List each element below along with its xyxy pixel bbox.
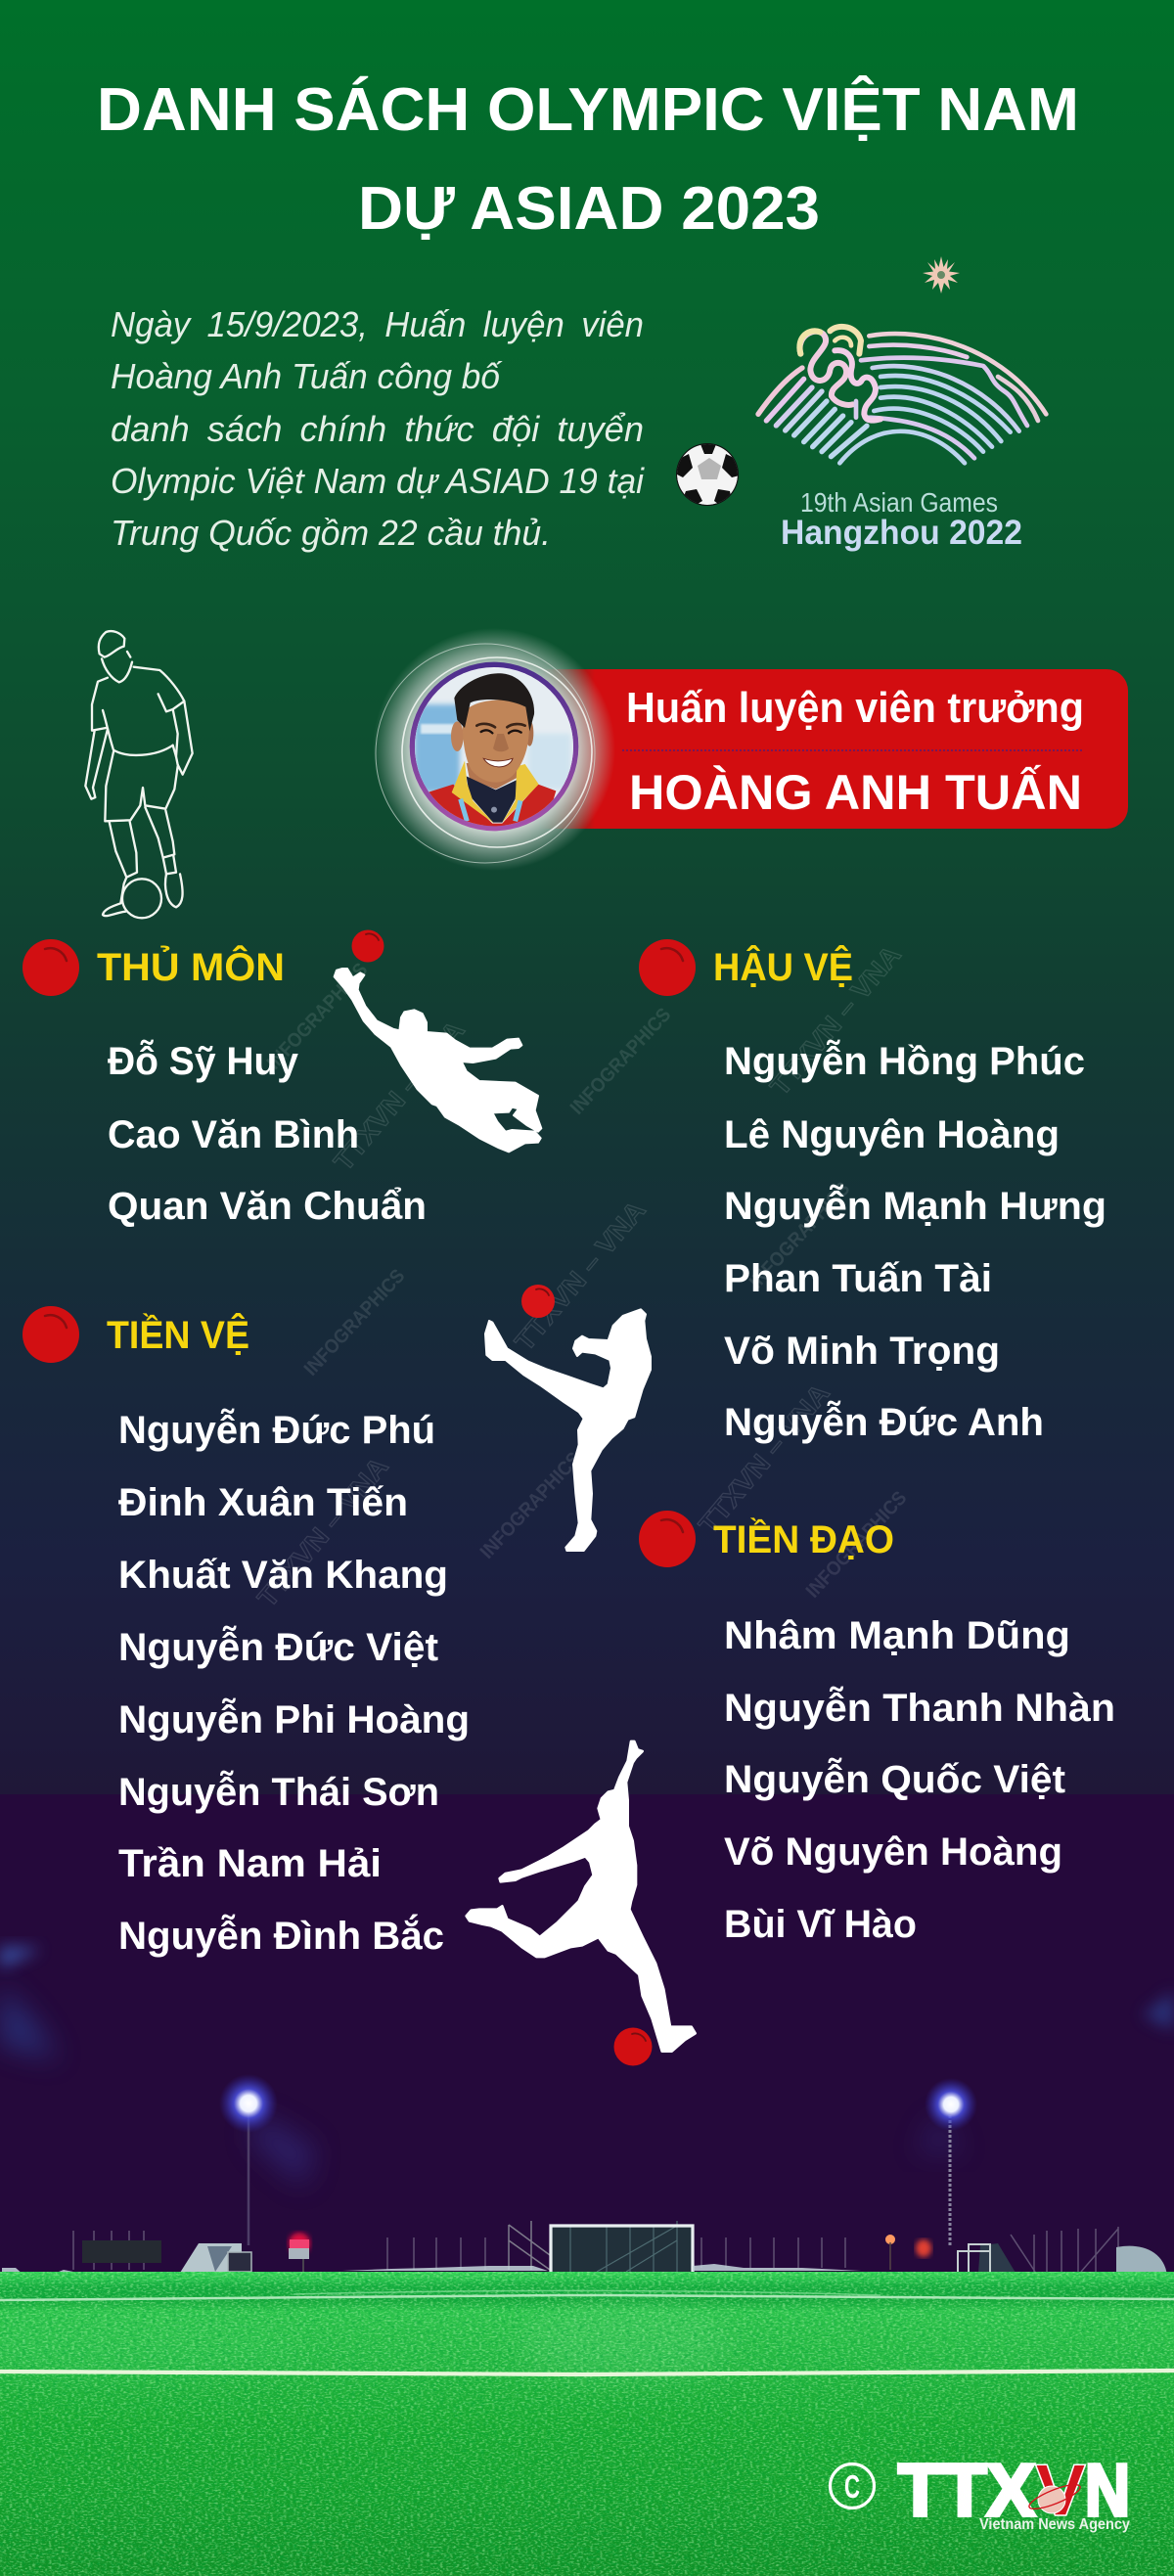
player list: Phan Tuấn Tài	[724, 1257, 992, 1300]
section: midfielders (Tiền vệ)	[23, 1306, 470, 1958]
logo sun	[923, 256, 960, 294]
dugout	[1116, 2246, 1167, 2276]
stadium background	[0, 1947, 1174, 2576]
watermarks: TTXVN – VNA	[765, 940, 907, 1102]
wordmark: N	[1085, 2449, 1130, 2531]
player list: Nhâm Mạnh Dũng	[724, 1614, 1070, 1657]
portrait halo	[373, 628, 615, 871]
red sign	[289, 2233, 310, 2272]
coach name: HOÀNG ANH TUẤN	[629, 765, 1082, 820]
icon: goalkeeper silhouette with ball	[335, 929, 541, 1152]
player list: Khuất Văn Khang	[118, 1554, 448, 1597]
Asian Games logo	[758, 256, 1046, 552]
title: DỰ ASIAD 2023	[358, 175, 820, 243]
wordmark: TTX	[898, 2449, 1035, 2531]
main goal	[509, 2221, 693, 2273]
red name plate	[540, 669, 1128, 829]
right small goal	[958, 2243, 1016, 2273]
watermarks: TTXVN – VNA	[252, 1452, 394, 1613]
title	[97, 76, 1079, 243]
player list: Nguyễn Quốc Việt	[724, 1756, 1065, 1801]
heading: THỦ MÔN	[97, 944, 285, 989]
player list: Nguyễn Thái Sơn	[118, 1769, 439, 1814]
player list	[108, 1038, 427, 1228]
icon: red ball bullet	[23, 1306, 79, 1363]
left small goal	[180, 2243, 251, 2273]
dotted divider	[622, 749, 1084, 751]
TTXVN logo	[830, 2449, 1130, 2533]
intro text block	[111, 304, 645, 553]
player list: Võ Nguyên Hoàng	[724, 1830, 1062, 1874]
heading: HẬU VỆ	[713, 944, 853, 989]
red lamps	[885, 2235, 931, 2270]
panel: head coach	[373, 628, 1128, 871]
player list: Trần Nam Hải	[118, 1842, 382, 1885]
globe mark	[1026, 2480, 1083, 2513]
watermarks: INFOGRAPHICS	[263, 959, 372, 1074]
player list: Lê Nguyên Hoàng	[724, 1113, 1060, 1156]
watermarks: TTXVN – VNA	[694, 1378, 835, 1540]
watermarks: INFOGRAPHICS	[745, 1178, 854, 1293]
player list: Nguyễn Đức Phú	[118, 1407, 435, 1452]
icon: outline player with ball	[85, 631, 193, 918]
section: forwards (Tiền đạo)	[639, 1511, 1115, 1946]
icon: kicking player silhouette with ball	[485, 1285, 651, 1551]
player list	[724, 1038, 1106, 1444]
player list: Võ Minh Trọng	[724, 1330, 1000, 1373]
copyright mark	[830, 2463, 875, 2508]
player list: Nguyễn Hồng Phúc	[724, 1038, 1085, 1083]
section: goalkeepers (Thủ môn)	[23, 939, 427, 1228]
icon: striker silhouette with ball	[467, 1741, 696, 2066]
wordmark: V	[1035, 2449, 1086, 2531]
heading: TIỀN VỆ	[107, 1312, 249, 1357]
title: DANH SÁCH OLYMPIC VIỆT NAM	[97, 76, 1079, 144]
logo text: 19th Asian Games	[800, 487, 998, 518]
watermarks: INFOGRAPHICS	[476, 1448, 585, 1563]
watermarks: TTXVN – VNA	[329, 1016, 471, 1177]
agency name: Vietnam News Agency	[979, 2516, 1130, 2533]
player list	[118, 1407, 470, 1958]
watermarks: INFOGRAPHICS	[566, 1004, 675, 1119]
player list: Nguyễn Đức Anh	[724, 1399, 1044, 1444]
scoreboard	[82, 2240, 161, 2263]
icon: red ball bullet	[23, 939, 79, 996]
player list: Nguyễn Phi Hoàng	[118, 1696, 470, 1741]
intro text block: Trung Quốc gồm 22 cầu thủ.	[111, 513, 551, 553]
light poles	[219, 2074, 977, 2245]
intro text block: Ngày 15/9/2023, Huấn luyện viên	[111, 304, 644, 344]
player list: Nguyễn Mạnh Hưng	[724, 1183, 1106, 1228]
logo emblem	[758, 327, 1046, 463]
watermarks: INFOGRAPHICS	[802, 1487, 911, 1603]
player list	[724, 1614, 1115, 1946]
wordmark	[898, 2449, 1130, 2531]
player list: Nguyễn Đình Bắc	[118, 1913, 444, 1958]
section: defenders (Hậu vệ)	[639, 939, 1106, 1444]
heading: TIỀN ĐẠO	[713, 1516, 894, 1561]
coach portrait	[410, 662, 578, 832]
fence posts	[73, 2227, 1118, 2272]
player list: Nguyễn Đức Việt	[118, 1624, 438, 1669]
grass field	[0, 2272, 1174, 2576]
player list: Nguyễn Thanh Nhàn	[724, 1685, 1115, 1730]
player list: Bùi Vĩ Hào	[724, 1903, 917, 1946]
watermarks: INFOGRAPHICS	[300, 1265, 409, 1380]
icon: red ball bullet	[639, 939, 696, 996]
snow mounds	[2, 2264, 861, 2277]
icon: red ball bullet	[639, 1511, 696, 1567]
watermarks	[252, 940, 911, 1613]
player list: Đinh Xuân Tiến	[118, 1481, 408, 1524]
player list: Cao Văn Bình	[108, 1113, 359, 1156]
player list: Đỗ Sỹ Huy	[108, 1038, 299, 1083]
icon: soccer ball	[675, 443, 740, 507]
decorative rings	[376, 644, 595, 863]
coach label: Huấn luyện viên trưởng	[626, 684, 1084, 732]
watermarks: TTXVN – VNA	[510, 1196, 652, 1357]
intro text block: Olympic Việt Nam dự ASIAD 19 tại	[111, 461, 645, 501]
copyright mark: C	[844, 2468, 860, 2505]
floodlight flares	[0, 1947, 1174, 2187]
intro text block: Hoàng Anh Tuấn công bố	[111, 356, 503, 396]
Asian Games logo: Hangzhou 2022	[781, 514, 1022, 552]
intro text block: danh sách chính thức đội tuyển	[111, 409, 644, 449]
player list: Quan Văn Chuẩn	[108, 1185, 427, 1228]
